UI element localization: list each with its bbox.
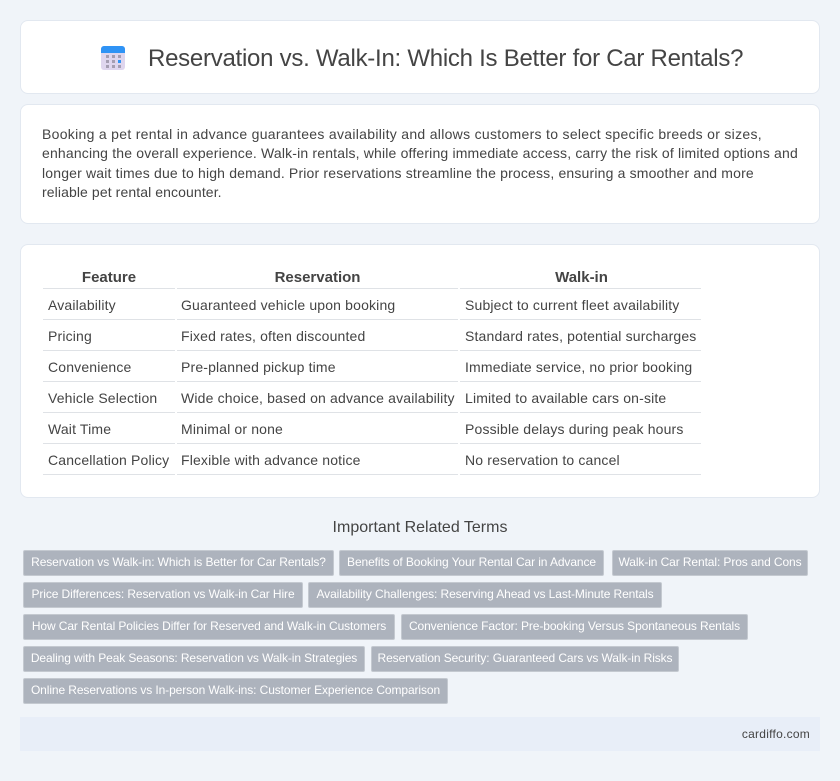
table rows: Wide choice, based on advance availability (181, 390, 455, 406)
table header (82, 269, 608, 286)
table rows: No reservation to cancel (465, 452, 620, 468)
intro panel (20, 104, 820, 224)
intro text: longer wait times due to high demand. Prior reservations streamline the process, ensuring a smoother and more (42, 165, 754, 181)
intro text (42, 126, 798, 200)
table rows: Availability (48, 297, 116, 313)
table rows: Minimal or none (181, 421, 283, 437)
related term tags: Price Differences: Reservation vs Walk-in Car Hire (31, 587, 295, 601)
table rows (43, 288, 701, 475)
related term tags: Reservation vs Walk-in: Which is Better for Car Rentals? (31, 555, 326, 569)
related term tags: Online Reservations vs In-person Walk-ins: Customer Experience Comparison (31, 683, 440, 697)
table rows: Immediate service, no prior booking (465, 359, 692, 375)
table rows: Cancellation Policy (48, 452, 169, 468)
icon: calendar (101, 46, 125, 70)
footer site name: cardiffo.com (742, 727, 810, 741)
comparison table panel (20, 244, 820, 498)
related term tags (23, 550, 808, 704)
table rows: Possible delays during peak hours (465, 421, 684, 437)
related term tags: Reservation Security: Guaranteed Cars vs Walk-in Risks (378, 651, 672, 665)
table rows: Standard rates, potential surcharges (465, 328, 696, 344)
table rows: Wait Time (48, 421, 111, 437)
table rows: Guaranteed vehicle upon booking (181, 297, 395, 313)
related term tags: Convenience Factor: Pre-booking Versus Spontaneous Rentals (409, 619, 740, 633)
table rows: Pre-planned pickup time (181, 359, 336, 375)
header panel (20, 20, 820, 94)
intro text: reliable pet rental encounter. (42, 184, 222, 200)
title: Reservation vs. Walk-In: Which Is Better for Car Rentals? (148, 45, 743, 72)
related term tags: Availability Challenges: Reserving Ahead vs Last-Minute Rentals (316, 587, 654, 601)
table rows: Subject to current fleet availability (465, 297, 679, 313)
related term tags: Dealing with Peak Seasons: Reservation vs Walk-in Strategies (31, 651, 357, 665)
table rows: Limited to available cars on-site (465, 390, 666, 406)
intro text: enhancing the overall experience. Walk-in rentals, while offering immediate access, carry the risk of limited options and (42, 145, 798, 161)
table rows: Fixed rates, often discounted (181, 328, 365, 344)
table header: Feature (82, 269, 136, 286)
table header: Walk-in (555, 269, 608, 286)
related term tags: Walk-in Car Rental: Pros and Cons (618, 555, 802, 569)
related term tags: Benefits of Booking Your Rental Car in Advance (347, 555, 596, 569)
table rows: Convenience (48, 359, 131, 375)
table header: Reservation (275, 269, 360, 286)
related term tags: How Car Rental Policies Differ for Reserved and Walk-in Customers (32, 619, 386, 633)
table rows: Flexible with advance notice (181, 452, 361, 468)
table rows: Pricing (48, 328, 92, 344)
table rows: Vehicle Selection (48, 390, 157, 406)
related terms heading: Important Related Terms (333, 519, 507, 536)
footer bar (20, 717, 820, 751)
intro text: Booking a pet rental in advance guarantees availability and allows customers to select specific breeds or sizes, (42, 126, 762, 142)
